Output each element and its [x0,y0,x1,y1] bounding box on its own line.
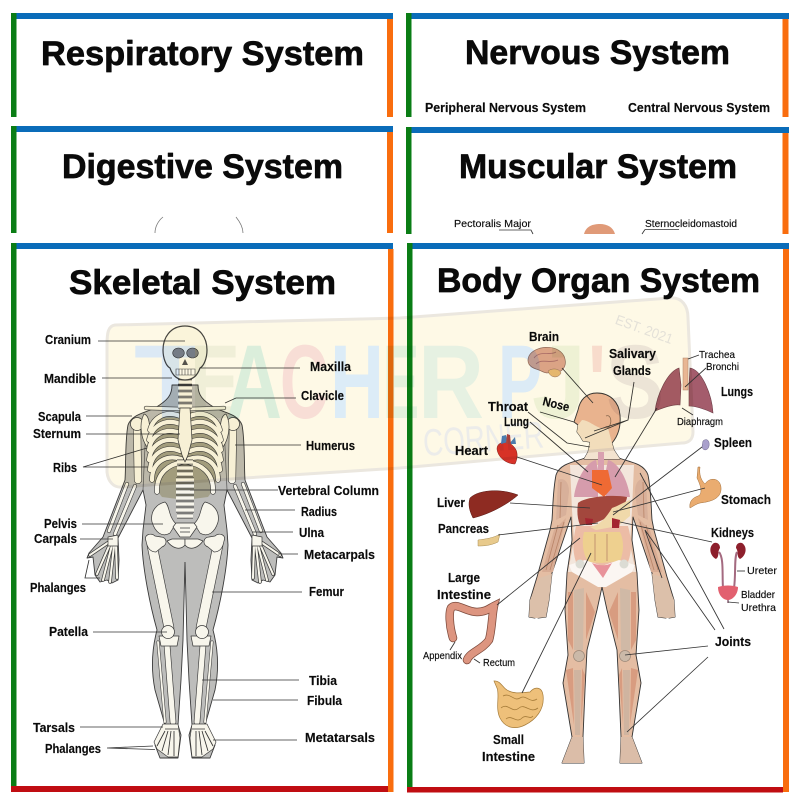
label: Mandible [44,372,172,386]
heading: Body Organ System: Body Organ System [437,262,760,300]
label: Small Intestine: Intestine [482,750,535,764]
label: Vertebral Column: Vertebral Column [278,484,379,498]
label: Ureter: Ureter [747,565,778,577]
label: Large Intestine: Intestine [437,588,491,602]
underwear and bladder [569,560,635,587]
label: Kidneys [620,522,754,542]
label: Carpals: Carpals [34,532,77,546]
body figure with organs [529,393,675,763]
label: Cranium: Cranium [45,333,91,347]
label: Stomach [613,488,771,512]
label: Appendix [423,642,463,662]
watermark: Teacher PJ's Corner: R [418,324,484,441]
label: Peripheral Nervous System: Peripheral Nervous System [425,101,586,115]
organ: liver [469,491,518,518]
label: Femur [212,585,344,599]
chest and abdomen [568,465,636,572]
watermark: Teacher PJ's Corner: P [498,324,542,441]
label: Salivary Glands: Glands [613,364,651,378]
label: Throat: Throat [488,400,529,414]
organ: lungs [655,358,713,413]
skeleton labels and leader lines [30,333,379,756]
label: Clavicle: Clavicle [301,389,344,403]
label: Brain: Brain [529,330,559,344]
label: Phalanges (foot) [45,742,155,756]
label: Bladder: Bladder [741,589,775,601]
label: Spleen: Spleen [714,436,752,450]
label: Tarsals [33,721,163,735]
label: Brain [529,330,593,403]
skeleton figure [87,326,283,758]
watermark: Teacher PJ's Corner: CORNER [422,415,545,465]
label: Liver [437,496,590,510]
panel: respiratory system [11,13,393,117]
organ: kidneys and bladder [710,543,746,603]
label: Tibia: Tibia [309,674,338,688]
label: Clavicle [225,389,344,403]
watermark: Teacher PJ's Corner: C [280,324,328,441]
label: Phalanges (hand) [30,560,100,595]
organ: pancreas [478,534,500,546]
label: Patella [49,625,167,639]
watermark: Teacher PJ's Corner: A [226,324,282,441]
organ labels and leader lines [423,330,778,764]
sternum [178,408,192,462]
label: Trachea: Trachea [699,349,735,361]
panel: nervous system [406,13,789,117]
spine [176,382,194,516]
label: Lung: Lung [504,415,529,429]
label: Pancreas: Pancreas [438,522,489,536]
label: Ulna: Ulna [299,526,325,540]
watermark: Teacher PJ's Corner: S [606,324,664,441]
label: Sternum: Sternum [33,427,81,441]
watermark: Teacher PJ's Corner: ' [588,324,606,441]
watermark: Teacher PJ's Corner: T [134,324,207,441]
label: Lungs: Lungs [721,385,753,399]
organ: spleen [702,440,709,450]
label: Liver: Liver [437,496,465,510]
label: Lung [504,415,588,472]
panel: body organ system [407,243,789,792]
label: Tibia [202,674,338,688]
label: Phalanges (hand): Phalanges [30,581,86,595]
label: Sternocleidomastoid: Sternocleidomastoid [645,218,737,230]
heading: Nervous System: Nervous System [465,34,730,72]
label: Joints: Joints [715,635,751,649]
label: Fibula [213,694,343,708]
heart in chest [592,470,612,497]
heading: Respiratory System: Respiratory System [41,35,364,73]
label: Patella: Patella [49,625,89,639]
label: Rectum: Rectum [483,657,515,669]
label: Tarsals: Tarsals [33,721,75,735]
label: Appendix: Appendix [423,650,463,662]
heading: Digestive System: Digestive System [62,148,343,186]
label: Pectoralis Major: Pectoralis Major [454,218,532,230]
label: Stomach: Stomach [721,493,771,507]
label: Throat [488,400,590,447]
label: Heart: Heart [455,444,489,458]
label: Humerus: Humerus [306,439,355,453]
label: Ulna [252,526,325,540]
label: Salivary Glands [585,347,656,438]
organ: stomach [690,467,721,508]
label: Spleen [613,436,752,515]
label: Radius: Radius [301,505,337,519]
stomach and pancreas [590,500,630,530]
label: Humerus [235,439,355,453]
pelvis half [152,502,185,535]
head profile [574,393,620,459]
watermark: Teacher PJ's Corner: J [532,324,586,441]
heading: Muscular System: Muscular System [459,148,737,186]
label: Joints [625,473,751,732]
liver in body [577,496,627,525]
label: Carpals [34,532,113,546]
label: Pelvis [44,517,163,531]
label: Large Intestine [437,538,580,605]
label: Large Intestine: Large [448,571,480,585]
organ: small intestine [494,681,543,728]
label: Ribs: Ribs [53,461,77,475]
label: Scapula: Scapula [38,410,82,424]
label: Small Intestine [482,553,591,764]
label: Urethra: Urethra [741,602,776,614]
panel: digestive system [11,126,393,233]
sacrum [173,523,197,537]
label: Nose: Nose [541,394,571,414]
skull [163,326,207,380]
watermark: Teacher PJ's Corner [107,298,693,487]
label: Lungs [615,385,753,477]
label: Salivary Glands: Salivary [609,347,656,361]
label: Diaphragm [677,408,723,428]
label: Central Nervous System: Central Nervous System [628,101,770,115]
cropped body outline [155,217,243,233]
label: Heart [455,444,602,485]
watermark: Teacher PJ's Corner: E [190,324,240,441]
colon surround [573,526,631,570]
cropped muscular head [584,224,615,234]
label: Diaphragm: Diaphragm [677,416,723,428]
label: Radius [245,505,337,519]
panel: muscular system [406,127,789,234]
label: Ribs [53,448,148,475]
label: Small Intestine: Small [493,733,524,747]
heading: Skeletal System: Skeletal System [69,264,336,302]
label: Bronchi: Bronchi [706,361,739,373]
watermark: Teacher PJ's Corner: EST. 2021 [613,311,675,347]
watermark: Teacher PJ's Corner: H [330,324,384,441]
rib cage [149,412,185,500]
label: Mandible: Mandible [44,372,96,386]
label: Metatarsals: Metatarsals [305,731,375,745]
label: Phalanges (foot): Phalanges [45,742,101,756]
panel: skeletal system [11,243,394,792]
label: Maxilla: Maxilla [310,360,352,374]
label: Fibula: Fibula [307,694,343,708]
organ: heart [497,434,517,464]
label: Pelvis: Pelvis [44,517,77,531]
organ: brain [528,347,565,377]
organ: large intestine [450,606,494,660]
label: Bronchi [685,361,739,387]
watermark: Teacher PJ's Corner: E [383,324,419,441]
label: Metacarpals: Metacarpals [304,548,375,562]
label: Pancreas [438,522,598,536]
label: Cranium [45,333,185,347]
label: Scapula [38,410,132,424]
intestines in body [583,532,623,563]
label: Kidneys: Kidneys [711,526,754,540]
lungs in chest [574,460,630,497]
label: Femur: Femur [309,585,344,599]
